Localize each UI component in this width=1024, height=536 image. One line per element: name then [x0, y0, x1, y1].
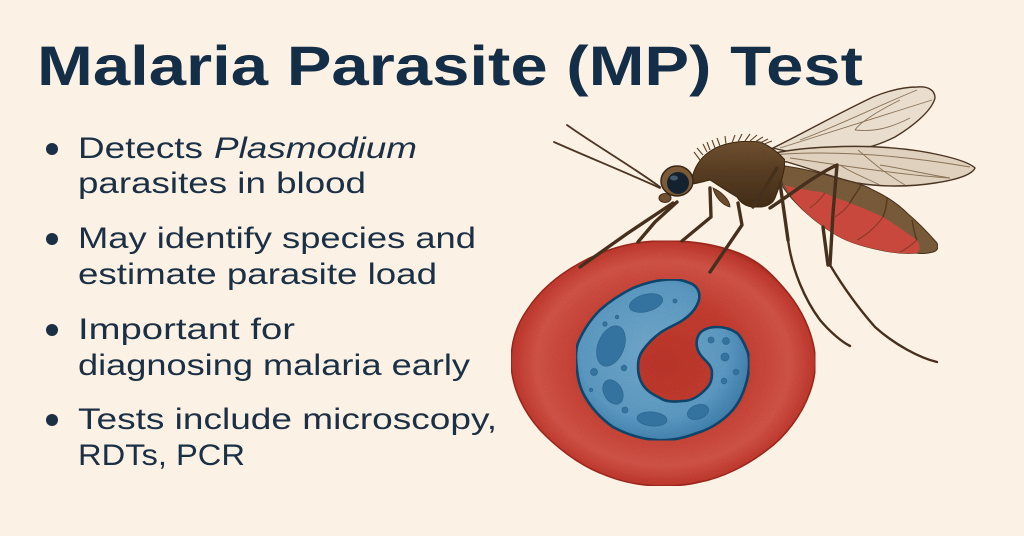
abdomen	[778, 165, 938, 254]
bullet: diagnosing early: diagnosing malaria early	[78, 349, 470, 382]
bullet: detects Plasmodium: Plasmodium	[214, 132, 417, 165]
illustration: mosquito	[554, 87, 975, 362]
thorax	[692, 141, 785, 207]
bullet: test types: Tests include microscopy,	[78, 403, 497, 436]
bullet: test types	[46, 403, 497, 472]
fuzz	[694, 134, 772, 160]
bullet: detects Plasmodium: parasites in blood	[78, 167, 366, 200]
bullet list	[46, 132, 497, 472]
bullet: diagnosing early	[46, 313, 470, 382]
parasite	[576, 279, 749, 440]
bullet: species and parasite load: estimate parasite load	[78, 258, 437, 291]
antennae	[554, 125, 660, 188]
bullet: diagnosing early: Important for	[78, 313, 295, 346]
bullet: species and parasite load: May identify species and	[78, 222, 476, 255]
bullet: detects Plasmodium	[46, 132, 417, 200]
small palp	[713, 188, 730, 207]
illustration: red blood cell	[511, 241, 815, 486]
bullet: species and parasite load	[46, 222, 476, 291]
wings	[753, 87, 975, 186]
bullet: detects Plasmodium: Detects	[78, 132, 203, 165]
title: Malaria Parasite (MP) Test	[37, 34, 863, 97]
bullet: test types: RDTs, PCR	[78, 439, 245, 472]
legs	[580, 165, 937, 362]
head and eye	[659, 166, 693, 202]
